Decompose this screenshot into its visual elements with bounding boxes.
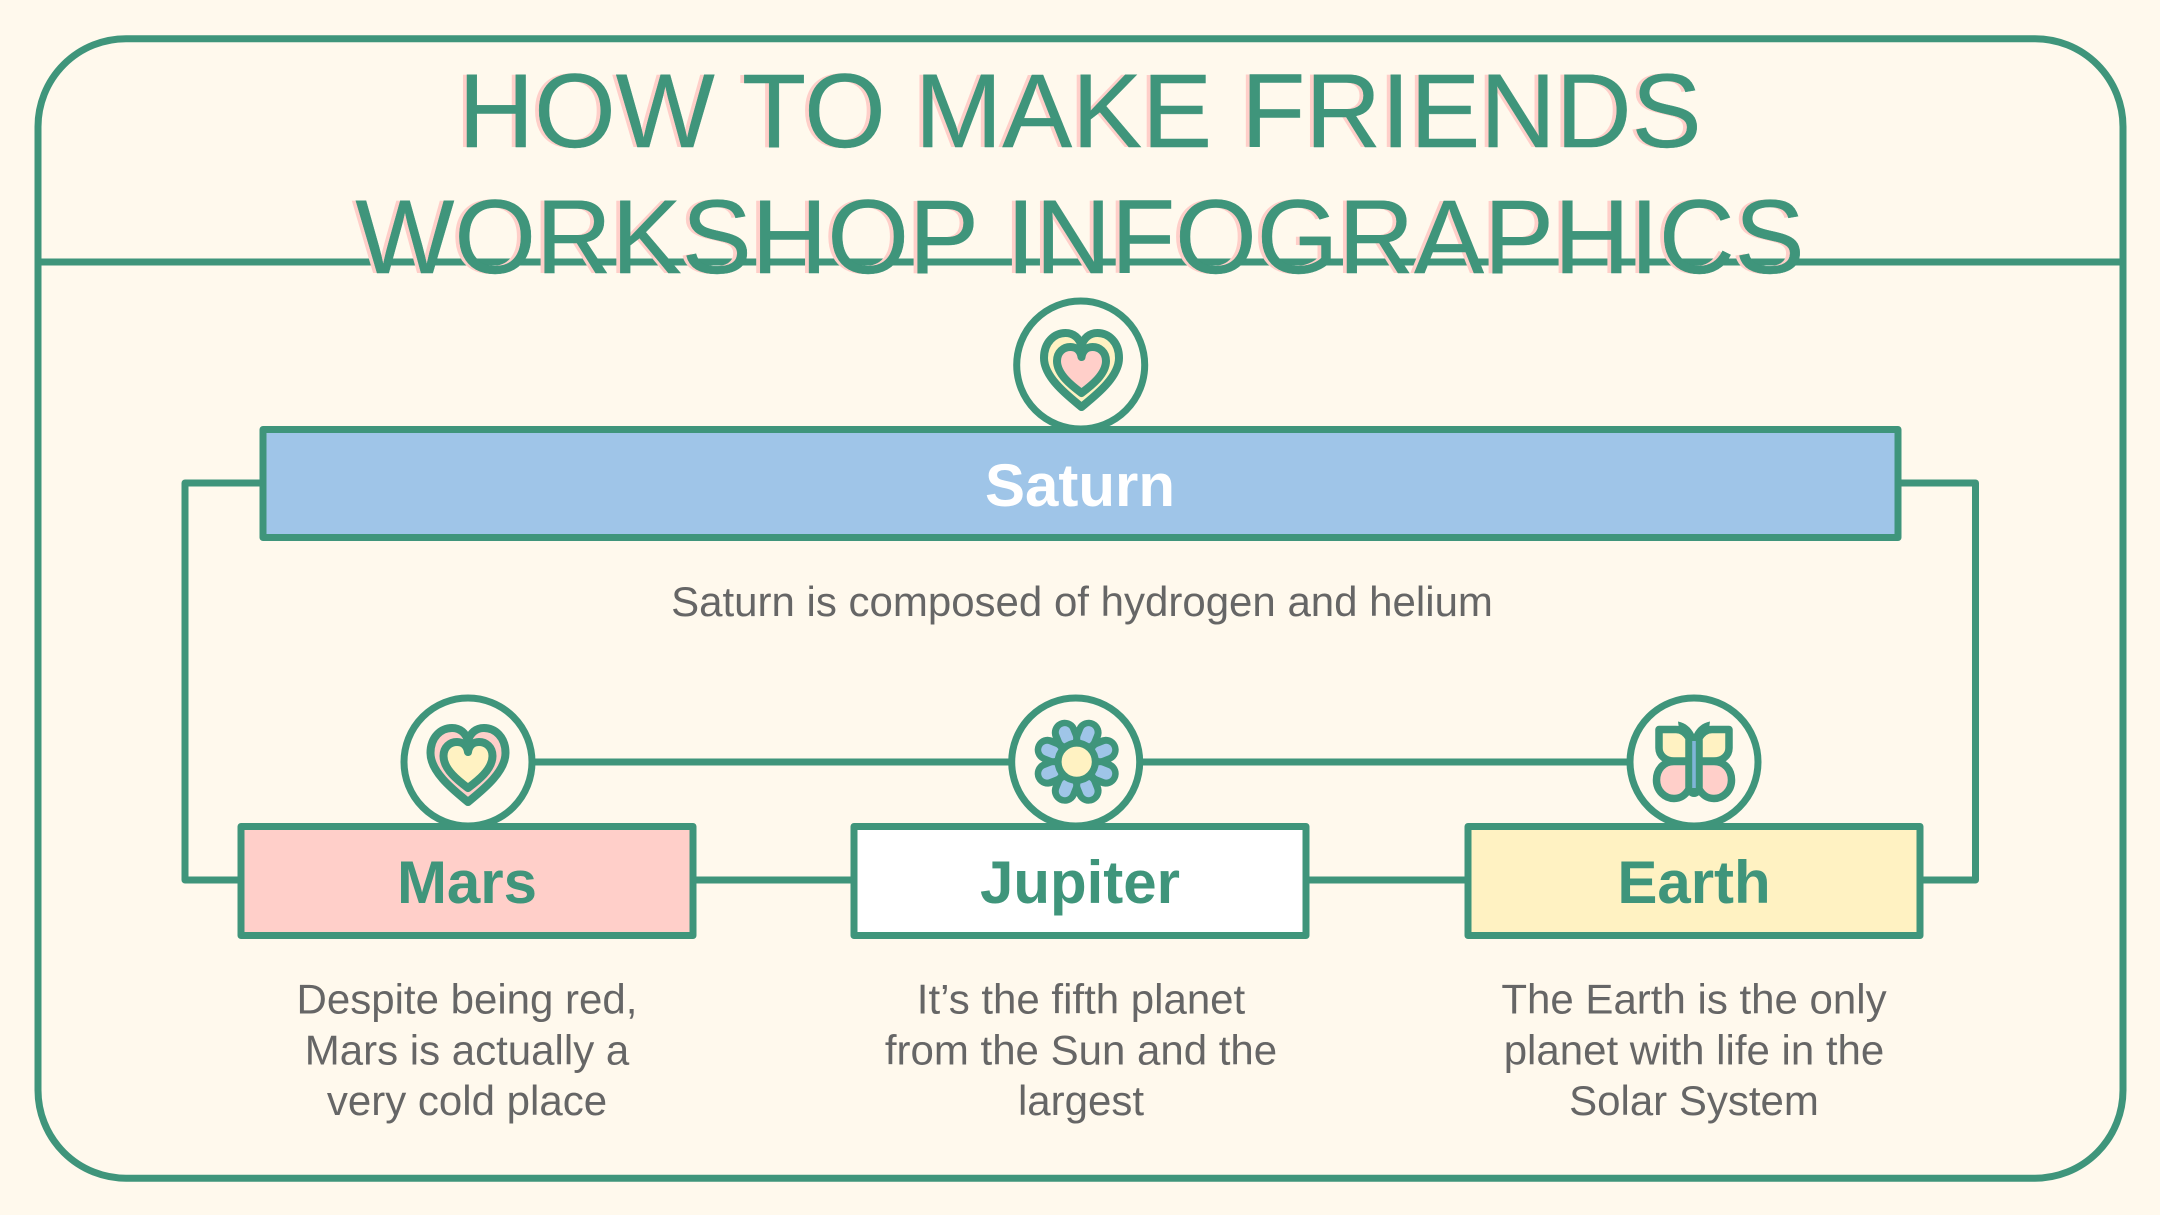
panel: Earth box: Earth xyxy=(1617,849,1771,916)
text: Earth description: Solar System xyxy=(1569,1077,1819,1124)
title xyxy=(352,53,1805,296)
icon: Mars heart xyxy=(404,698,532,826)
connector: left bracket xyxy=(185,483,263,880)
text: Mars description xyxy=(297,976,637,1124)
text: Earth description xyxy=(1501,976,1887,1124)
text: Saturn description: Saturn is composed of hydrogen and helium xyxy=(671,578,1493,625)
connector: icons row xyxy=(532,758,1630,766)
text: Mars description: Mars is actually a xyxy=(305,1026,630,1074)
panel: Mars box xyxy=(241,826,693,936)
antennae xyxy=(1678,722,1710,748)
text: Jupiter description: from the Sun and the xyxy=(885,1026,1277,1074)
title: WORKSHOP INFOGRAPHICS xyxy=(355,179,1805,296)
text: Mars description: very cold place xyxy=(327,1077,607,1124)
title: HOW TO MAKE FRIENDS xyxy=(458,53,1702,170)
panel: Saturn box: Saturn xyxy=(985,452,1175,519)
connector: right bracket xyxy=(1898,483,1976,880)
text: Earth description: planet with life in the xyxy=(1504,1026,1884,1074)
text: Jupiter description: It’s the fifth planet xyxy=(917,976,1246,1022)
text: Jupiter description xyxy=(885,976,1277,1124)
text: Mars description: Despite being red, xyxy=(297,976,637,1022)
text: Jupiter description: largest xyxy=(1018,1077,1144,1124)
panel: Mars box: Mars xyxy=(397,849,537,916)
panel: Jupiter box xyxy=(854,826,1306,936)
text: Earth description: The Earth is the only xyxy=(1501,976,1887,1022)
icon: Saturn heart xyxy=(1017,301,1145,429)
connector: boxes row xyxy=(693,876,1468,884)
icon: Earth butterfly xyxy=(1630,698,1758,826)
panel: Saturn box xyxy=(263,430,1898,538)
panel: Earth box xyxy=(1468,826,1920,936)
icon: Jupiter flower xyxy=(1012,698,1140,826)
panel: Jupiter box: Jupiter xyxy=(980,849,1180,916)
